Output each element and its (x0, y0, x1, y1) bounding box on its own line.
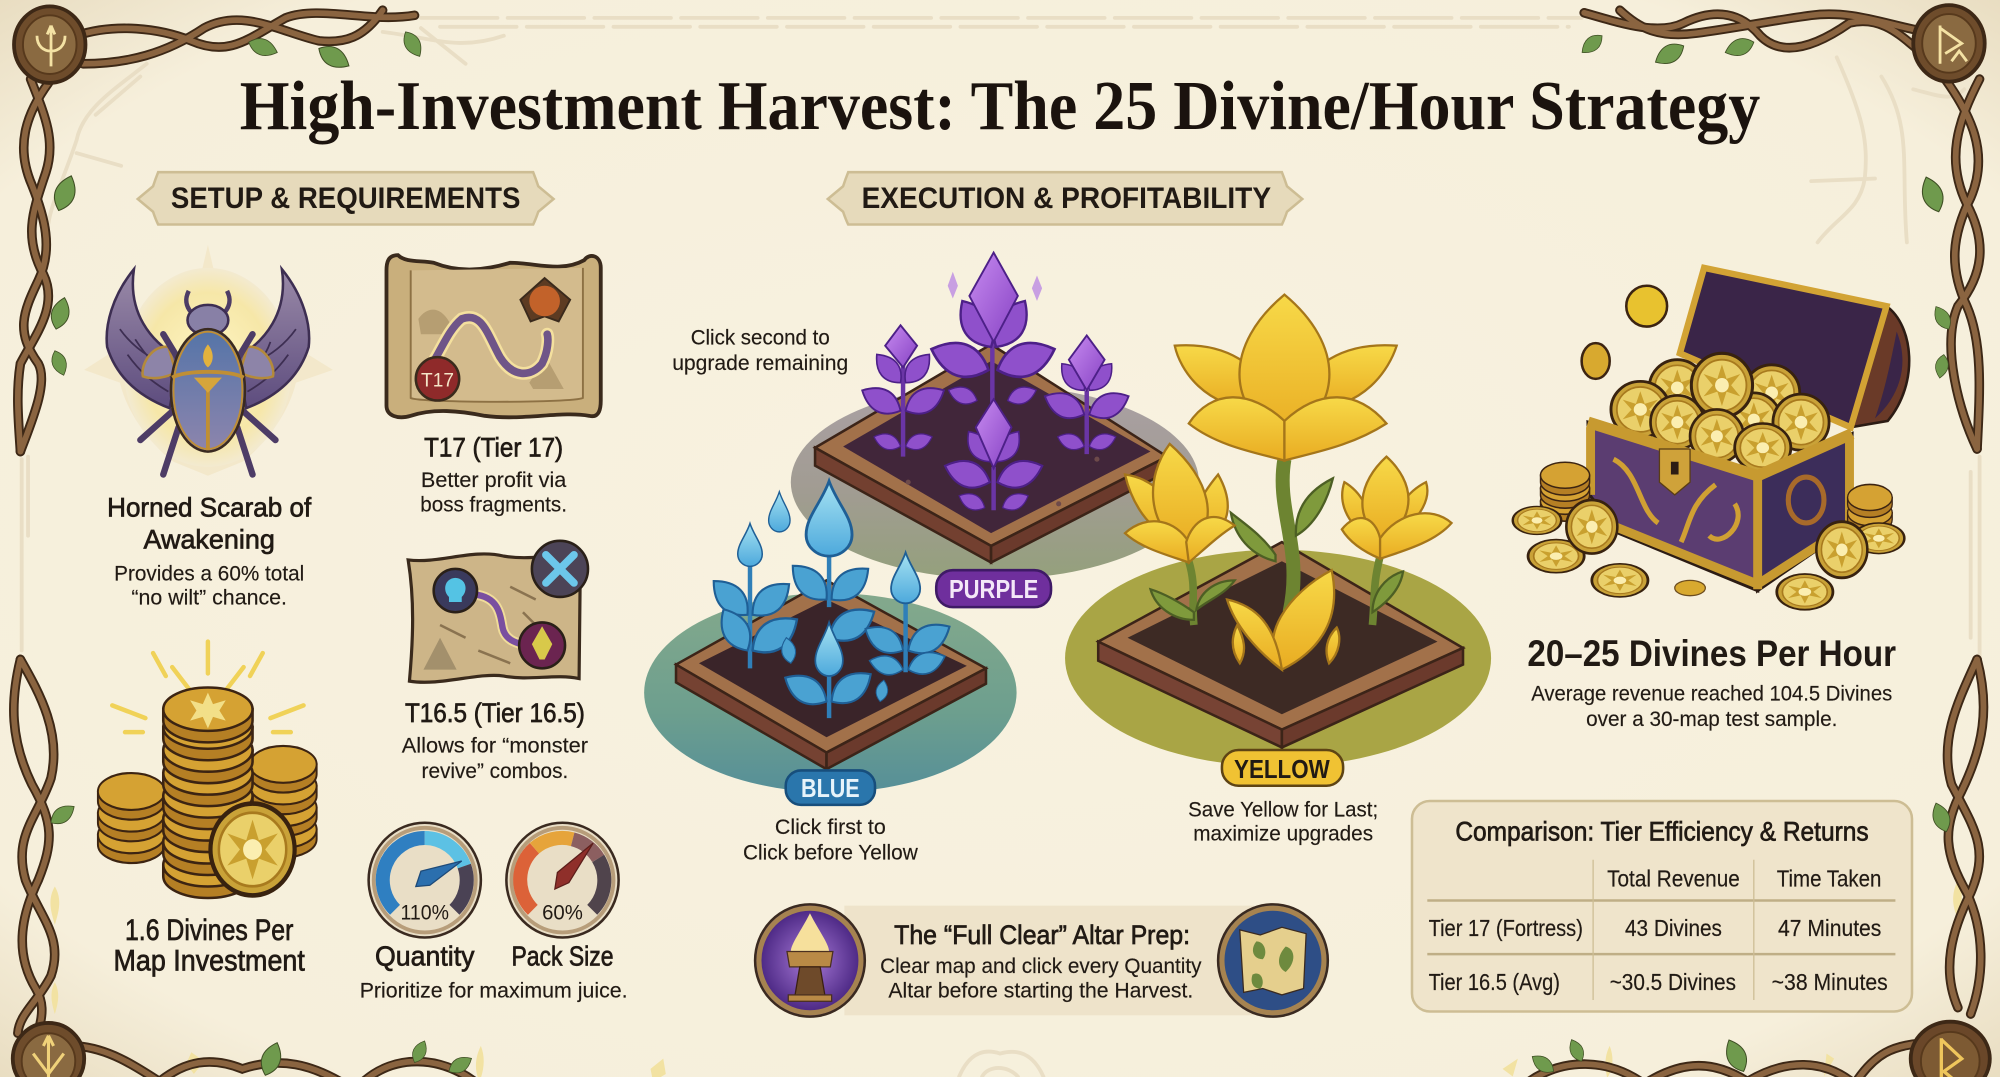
table row: tier 17: 43 Divines (1625, 915, 1722, 941)
label: T17 tier 17: T17 (Tier 17) (424, 433, 563, 463)
label: purple: PURPLE (949, 576, 1038, 604)
table row: tier 17: Tier 17 (Fortress) (1429, 915, 1583, 941)
heading: execution and profitability (828, 172, 1302, 225)
gauge: quantity 110%: 110% (401, 900, 449, 925)
icon: horned scarab (84, 245, 333, 476)
table row: tier 16.5: Tier 16.5 (Avg) (1429, 969, 1560, 995)
label: horned scarab of awakening (107, 493, 312, 554)
label: yellow: YELLOW (1234, 756, 1331, 784)
table row: tier 16.5: ~38 Minutes (1772, 969, 1888, 995)
icon: T16.5 map (408, 541, 588, 682)
description: no wilt chance: Provides a 60% total (114, 560, 304, 585)
panel: comparison table (1412, 801, 1912, 1011)
altar prep text: Clear map and click every Quantity (880, 953, 1202, 978)
description: boss fragments: boss fragments. (420, 491, 567, 516)
description: prioritize: Prioritize for maximum juice. (360, 977, 628, 1002)
gauge: pack size 60%: 60% (542, 900, 583, 925)
plot: purple crystals (791, 253, 1199, 607)
medallion: rune (1913, 5, 1985, 82)
label: investment per map (114, 914, 305, 978)
altar prep text: The “Full Clear” Altar Prep: (894, 920, 1190, 950)
panel: divine investment (98, 642, 317, 978)
label: horned scarab of awakening: Horned Scarab of (107, 493, 312, 523)
heading: setup and requirements: SETUP & REQUIREMENTS (171, 182, 520, 215)
heading: execution and profitability: EXECUTION & PROFITABILITY (862, 182, 1271, 215)
caption: blue step: Click first to (775, 814, 886, 839)
panel: T16.5 (402, 541, 588, 783)
description: boss fragments: Better profit via (421, 467, 567, 492)
golden glints near the bottom border (50, 880, 1962, 1077)
icon: map medallion (1218, 904, 1328, 1017)
title: High-Investment Harvest: The 25 Divine/Hour Strategy (240, 67, 1760, 145)
altar prep text (880, 920, 1202, 1002)
altar prep text: Altar before starting the Harvest. (888, 977, 1193, 1002)
table headers: Total Revenue (1607, 865, 1740, 891)
label: pack size: Pack Size (511, 941, 614, 972)
stat: divines per hour: 20–25 Divines Per Hour (1527, 633, 1896, 674)
description: boss fragments (420, 467, 567, 516)
description: monster revive combos: revive” combos. (422, 758, 568, 783)
gauge: pack size 60% (506, 823, 619, 938)
label: investment per map: Map Investment (114, 945, 305, 978)
icon: coin stacks with rays (98, 642, 317, 898)
caption: blue step (743, 814, 918, 865)
table row: tier 16.5: ~30.5 Divines (1610, 969, 1736, 995)
table row: tier 16.5 (1429, 969, 1888, 995)
vine border: top left (14, 6, 415, 452)
gauge: quantity 110% (369, 823, 481, 938)
label: quantity: Quantity (375, 941, 474, 972)
description: monster revive combos: Allows for “monster (402, 733, 588, 758)
table title: Comparison: Tier Efficiency & Returns (1455, 817, 1869, 847)
yellow plants (1125, 295, 1452, 670)
icon: T17 scroll map (386, 255, 601, 417)
label: investment per map: 1.6 Divines Per (125, 914, 294, 947)
panel: T17 (386, 255, 601, 516)
vine border: bottom left (13, 659, 474, 1077)
medallion: rune (1911, 1022, 1990, 1077)
description: monster revive combos (402, 733, 588, 783)
description: average revenue: Average revenue reached 104.5 Divines (1531, 680, 1892, 705)
panel: gauges (360, 823, 628, 1002)
blue plants (705, 481, 956, 718)
label: T16.5 tier 16.5: T16.5 (Tier 16.5) (405, 698, 585, 728)
description: no wilt chance: “no wilt” chance. (131, 585, 287, 610)
caption: yellow step (1188, 796, 1378, 846)
heading: setup and requirements (138, 172, 554, 225)
description: no wilt chance (114, 560, 304, 610)
plot: yellow flowers (1065, 295, 1491, 846)
caption: yellow step: Save Yellow for Last; (1188, 796, 1378, 821)
panel: scarab (84, 245, 333, 610)
label: purple (936, 570, 1051, 607)
vine border: bottom right (1526, 659, 1990, 1077)
caption: purple step (672, 324, 848, 375)
description: average revenue: over a 30-map test sample. (1586, 706, 1837, 731)
label: horned scarab of awakening: Awakening (143, 524, 275, 554)
caption: purple step: upgrade remaining (672, 350, 848, 375)
purple plants (857, 253, 1133, 514)
label: blue (786, 770, 875, 805)
table row: tier 17: 47 Minutes (1778, 915, 1881, 941)
table headers: Time Taken (1777, 865, 1881, 891)
panel: full clear altar prep (755, 904, 1328, 1017)
medallion: trident rune (13, 1023, 84, 1077)
caption: blue step: Click before Yellow (743, 840, 918, 865)
vine border: top right (1584, 5, 1985, 449)
plot: blue sprouts (644, 481, 1017, 865)
description: average revenue (1531, 680, 1892, 731)
table row: tier 17 (1429, 915, 1881, 941)
icon: treasure chest with coins (1513, 268, 1909, 610)
panel: treasure chest (1513, 268, 1909, 731)
caption: yellow step: maximize upgrades (1193, 821, 1373, 846)
icon: T17 scroll map: T17 (421, 370, 454, 391)
label: blue: BLUE (801, 775, 860, 803)
icon: altar (755, 904, 865, 1017)
medallion: trident rune (14, 6, 85, 83)
caption: purple step: Click second to (691, 324, 830, 349)
table headers (1607, 865, 1881, 891)
